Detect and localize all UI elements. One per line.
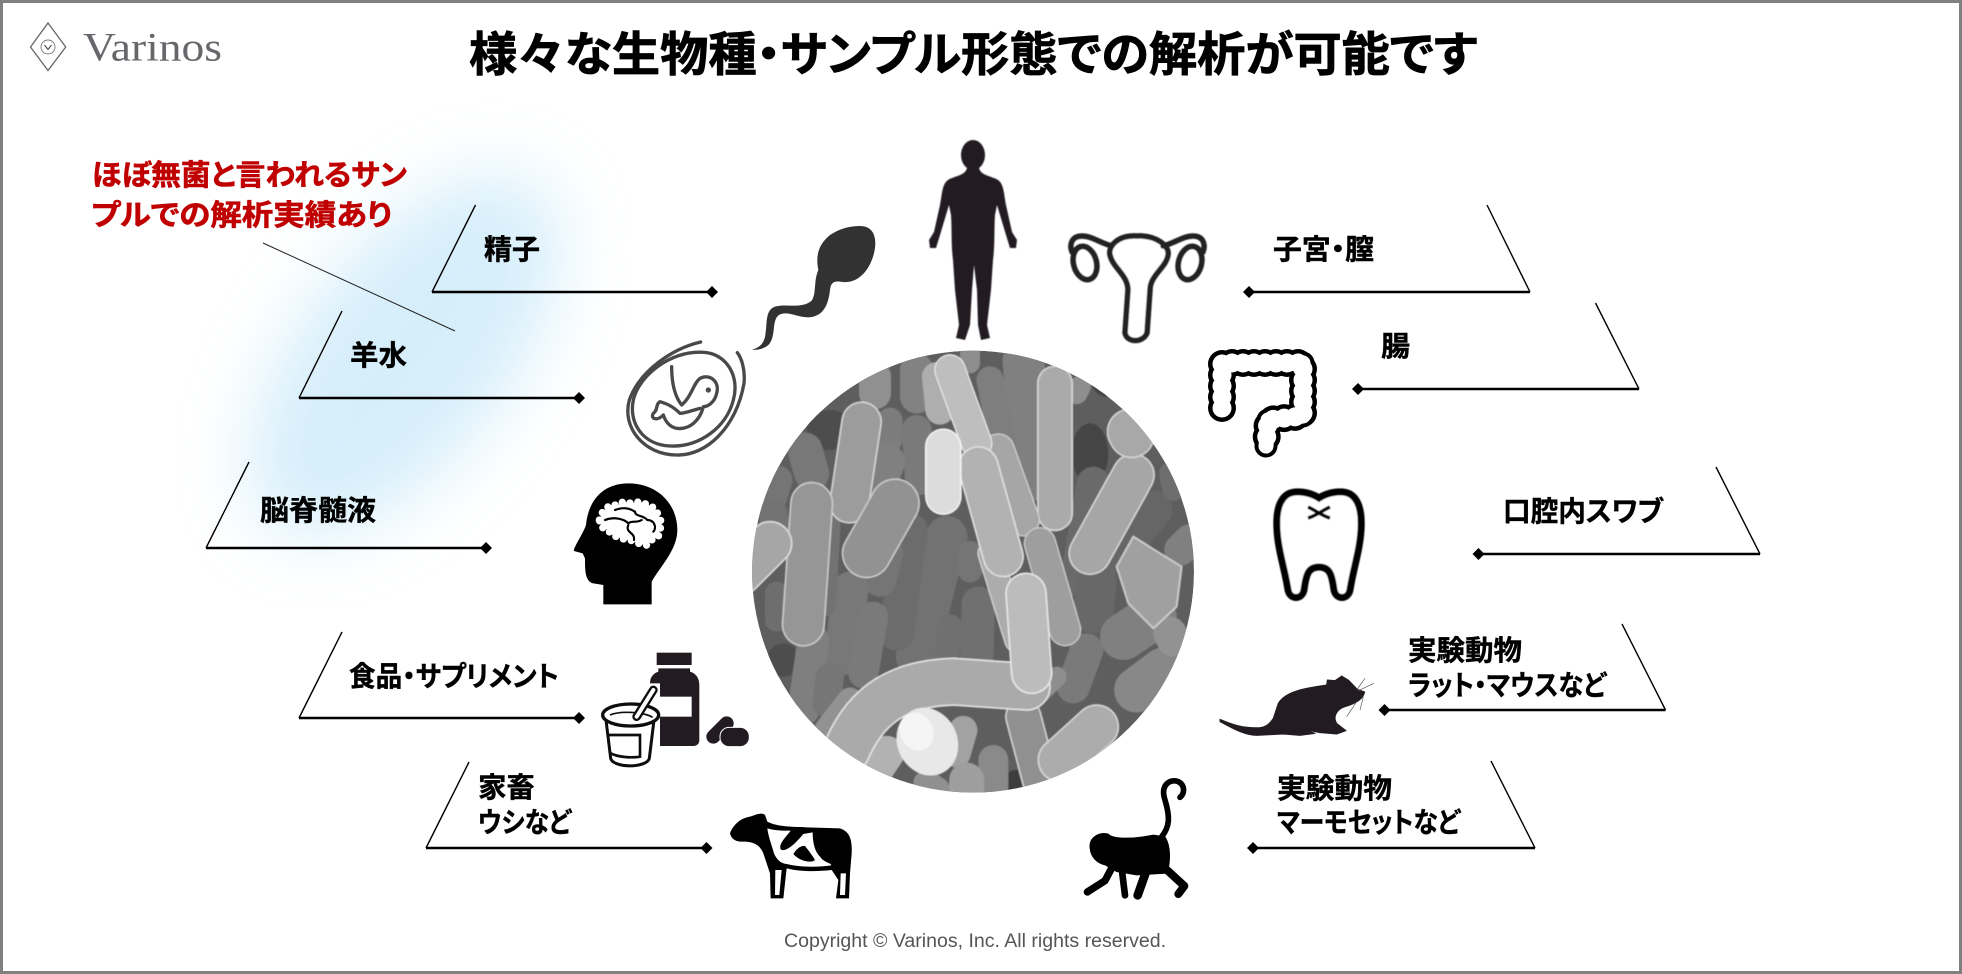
icon: colon: [1222, 363, 1303, 446]
callout: sterile samples note: ほぼ無菌と言われるサン: [92, 159, 407, 192]
icon: fetus: [628, 342, 744, 455]
icon: tooth: [1277, 492, 1361, 598]
dark gaps: [806, 410, 842, 450]
label: livestock: 家畜: [478, 772, 535, 803]
title: 様々な生物種・サンプル形態での解析が可能です: [469, 28, 1477, 81]
label: oral swab: [1472, 467, 1760, 560]
label: intestine: 腸: [1381, 331, 1410, 362]
bacteria micrograph: [740, 351, 1194, 800]
label: lab animals rat mouse: 実験動物: [1408, 635, 1522, 666]
label: semen: [432, 205, 718, 298]
logo: [30, 23, 222, 70]
label: semen: 精子: [484, 234, 540, 265]
label: food and supplements: 食品・サプリメント: [349, 661, 559, 692]
icon: cow: [730, 814, 852, 898]
label: uterus and vagina: 子宮・膣: [1273, 234, 1374, 265]
label: food and supplements: [299, 632, 585, 724]
mid rods: [880, 462, 887, 480]
icon: human silhouette: [929, 140, 1017, 340]
back rods: [1023, 360, 1033, 480]
label: oral swab: 口腔内スワブ: [1503, 495, 1664, 527]
label: livestock: ウシなど: [478, 807, 573, 838]
label: lab animals rat mouse: ラット・マウスなど: [1408, 670, 1608, 701]
callout: sterile samples note: [91, 159, 455, 331]
copyright: Copyright © Varinos, Inc. All rights reserved.: [784, 931, 1166, 952]
icon: supplements and yogurt: [603, 653, 749, 766]
label: cerebrospinal fluid: [206, 462, 492, 554]
label: lab animals rat mouse: [1378, 624, 1666, 716]
icon: monkey: [1087, 781, 1184, 895]
icon: rat: [1220, 676, 1374, 735]
icon: sperm: [752, 226, 875, 350]
label: lab animals marmoset: [1247, 761, 1535, 854]
label: cerebrospinal fluid: 脳脊髄液: [260, 495, 376, 526]
label: lab animals marmoset: マーモセットなど: [1277, 807, 1462, 838]
label: amniotic fluid: 羊水: [350, 340, 407, 371]
icon: head with brain: [574, 483, 677, 604]
label: lab animals marmoset: 実験動物: [1277, 773, 1392, 804]
callout: sterile samples note: プルでの解析実績あり: [91, 199, 392, 232]
icon: uterus: [1069, 236, 1206, 340]
label: uterus and vagina: [1243, 205, 1530, 298]
label: intestine: [1352, 303, 1639, 395]
label: amniotic fluid: [299, 311, 585, 404]
logo: Varinos: [83, 24, 222, 70]
label: livestock: [426, 762, 712, 854]
blue glow behind sterile samples: [190, 121, 620, 589]
